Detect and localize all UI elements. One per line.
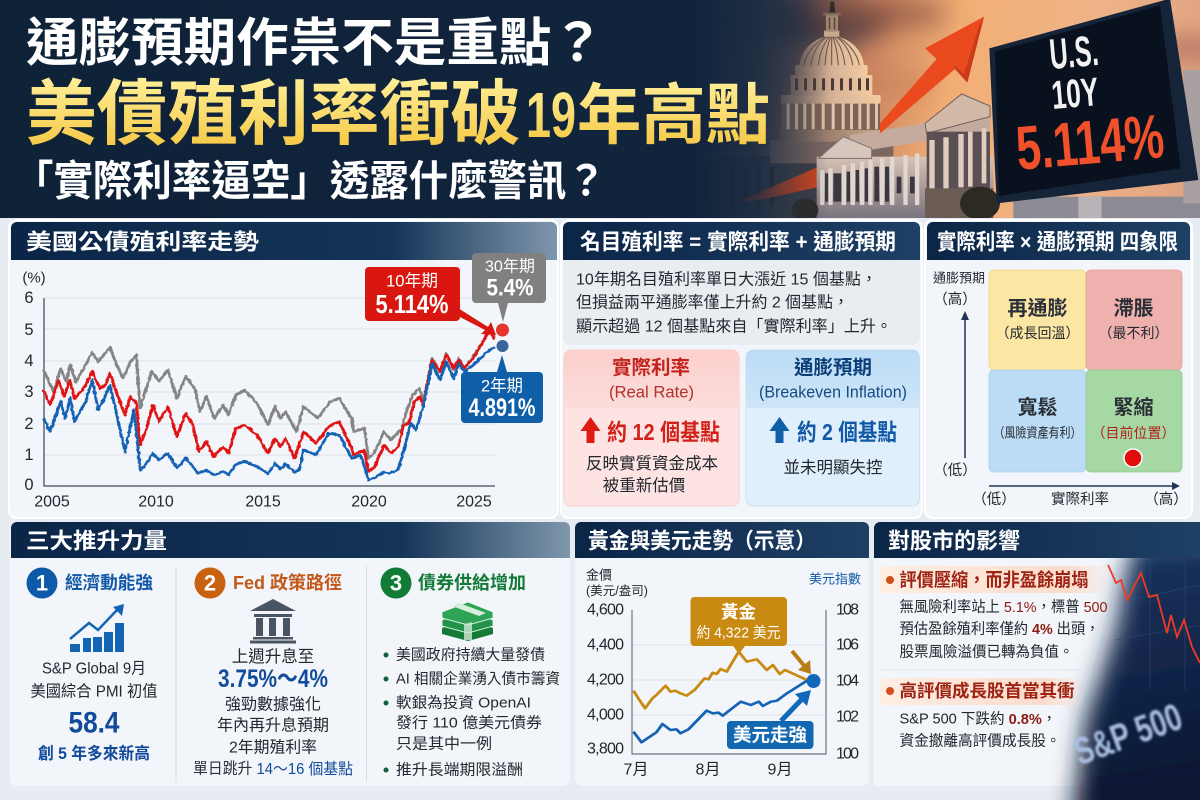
quadrant: tightening: 緊縮	[1114, 395, 1154, 419]
title: 美債殖利率衝破	[26, 76, 521, 154]
panel: quadrant	[925, 220, 1192, 518]
axes: 0	[24, 476, 34, 494]
column 3: bond supply: 發行 110 億美元債券	[396, 714, 542, 732]
chart axes: 106	[836, 636, 859, 654]
chart axes: 4,200	[587, 672, 624, 688]
column 2: Fed: 單日跳升 14～16 個基點	[193, 760, 353, 778]
card: real rate: 約 12 個基點	[607, 419, 720, 445]
column 2: Fed: 3.75%～4%	[218, 665, 328, 693]
chart axes: 108	[836, 602, 859, 618]
center wing	[817, 157, 993, 220]
block: growth stocks: S&P 500 下跌約 0.8%，	[900, 710, 1057, 728]
title: 年高點	[577, 78, 770, 152]
callout: dollar	[727, 721, 814, 749]
callout: 2-year: 4.891%	[468, 394, 536, 422]
explanation text: 顯示超過 12 個基點來自「實際利率」上升。	[576, 316, 892, 336]
quadrant: tightening	[1086, 370, 1182, 472]
axes: 3	[24, 383, 34, 401]
quadrant axes: （高）	[1144, 491, 1188, 508]
card: breakeven inflation: 並未明顯失控	[784, 458, 882, 477]
hero banner	[0, 0, 1200, 222]
callout: 10-year	[365, 267, 496, 335]
column 2: Fed	[193, 568, 353, 778]
callout: 2-year: 2年期	[481, 376, 523, 396]
card: breakeven inflation: (Breakeven Inflation)	[759, 382, 907, 402]
arrow: gold	[792, 651, 811, 674]
column 1: economy: 經濟動能強	[65, 572, 153, 593]
building: US Capitol	[740, 0, 1200, 218]
callout: 10-year: 10年期	[386, 272, 438, 290]
chart axes: 104	[836, 672, 859, 690]
column 2: Fed: 上週升息至	[232, 647, 314, 666]
quadrant axes: 實際利率	[1051, 490, 1109, 508]
quadrant: stagflation	[1086, 270, 1182, 370]
explanation text: 但損益兩平通膨率僅上升約 2 個基點，	[576, 294, 849, 312]
quadrant axes: （高）	[933, 291, 977, 308]
callout: 30-year	[472, 253, 546, 322]
chart axes: 9月	[768, 762, 792, 778]
title: 19	[526, 79, 576, 151]
column 3: bond supply: 推升長端期限溢酬	[396, 762, 523, 778]
axes: 1	[24, 446, 34, 464]
card: breakeven inflation: 通膨預期	[794, 357, 872, 379]
quadrant axes: （低）	[933, 462, 977, 479]
icon: bank	[250, 599, 296, 644]
title: 通膨預期作祟不是重點？	[26, 15, 604, 73]
chart axes: 4,600	[587, 602, 624, 618]
explanation text: 10年期名目殖利率單日大漲近 15 個基點，	[576, 270, 877, 288]
red arrow	[880, 17, 984, 133]
explanation text	[563, 260, 920, 345]
quadrant: easing	[989, 370, 1086, 472]
heading: 三大推升力量	[26, 528, 167, 554]
panel: three drivers	[10, 522, 570, 786]
chart axes: 4,400	[587, 636, 624, 654]
column 2: Fed: 強勁數據強化	[225, 696, 321, 714]
column 1: economy	[26, 568, 158, 763]
heading: 黃金與美元走勢（示意）	[588, 528, 816, 554]
chart axes: 4,000	[587, 706, 624, 724]
quadrant: easing: （風險資產有利）	[994, 424, 1082, 440]
block: valuation compression: 股票風險溢價已轉為負值。	[900, 644, 1074, 660]
board text: U.S. 10Y: U.S.	[1048, 27, 1100, 79]
callout: 30-year: 5.4%	[486, 274, 534, 302]
block: valuation compression: 預估盈餘殖利率僅約 4% 出頭，	[900, 620, 1100, 638]
column 3: bond supply: AI 相關企業湧入債市籌資	[396, 670, 560, 688]
callout: dollar: 美元走強	[733, 724, 807, 746]
icon: banknotes	[442, 602, 493, 641]
axes: 2010	[138, 494, 174, 510]
column 2: Fed: Fed 政策路徑	[233, 572, 342, 593]
axes: 6	[24, 289, 34, 307]
column 2: Fed: 2年期殖利率	[229, 738, 317, 756]
column 1: economy: S&P Global 9月	[42, 660, 146, 678]
quadrant: reflation	[989, 270, 1086, 370]
chart axes: 美元指數	[809, 572, 861, 586]
callout: gold: 約 4,322 美元	[696, 624, 780, 642]
quadrant axes: （低）	[972, 491, 1016, 508]
quadrant axes: 通膨預期	[933, 270, 985, 286]
block: valuation compression: 評價壓縮，而非盈餘崩塌	[900, 570, 1088, 590]
heading: 對股市的影響	[888, 528, 1020, 554]
column 2: Fed: 年內再升息預期	[217, 716, 329, 734]
icon: growth chart	[70, 604, 124, 652]
callout: 30-year: 30年期	[485, 258, 535, 276]
title	[14, 15, 770, 204]
chart axes: (美元/盎司)	[586, 584, 648, 598]
column 3: bond supply: 軟銀為投資 OpenAI	[396, 694, 531, 712]
quadrant: easing: 寬鬆	[1018, 396, 1058, 419]
marker dots	[496, 324, 509, 352]
card: real rate	[564, 350, 739, 506]
chart axes: 8月	[696, 762, 720, 778]
column 1: economy: 美國綜合 PMI 初值	[30, 682, 158, 700]
panel: stock impact	[874, 522, 1200, 800]
marker dot	[806, 674, 820, 688]
quadrant: tightening: （目前位置）	[1092, 425, 1176, 441]
block: growth stocks: 資金撤離高評價成長股。	[900, 732, 1060, 750]
image: S&P 500 board	[1068, 540, 1200, 800]
title: 「實際利率逼空」透露什麼警訊？	[14, 158, 606, 204]
column 2: Fed: 2	[204, 570, 216, 596]
quadrant axes	[933, 270, 1188, 508]
arrow: dollar	[781, 690, 811, 721]
axes: 2020	[351, 494, 387, 510]
lower arrow segment	[738, 166, 820, 202]
quadrant: stagflation: （最不利）	[1098, 325, 1168, 341]
column 1: economy: 創 5 年多來新高	[38, 743, 150, 763]
card: real rate: 反映實質資金成本	[586, 454, 718, 473]
card: real rate: (Real Rate)	[609, 382, 694, 402]
card: breakeven inflation	[746, 350, 920, 506]
callout: gold: 黃金	[721, 602, 756, 622]
axes: 5	[24, 321, 34, 339]
callout: 10-year: 5.114%	[376, 289, 448, 319]
column 1: economy: 1	[36, 570, 48, 596]
icon: blue up arrow	[770, 417, 790, 443]
card: real rate: 被重新估價	[603, 476, 685, 495]
chart axes: 3,800	[587, 740, 624, 758]
hero banner: 10Y	[1050, 70, 1101, 118]
panel: formula	[561, 220, 922, 518]
panel: yield chart	[9, 220, 558, 518]
card: breakeven inflation: 約 2 個基點	[797, 419, 897, 445]
column 1: economy: 58.4	[68, 706, 120, 740]
axes	[22, 270, 495, 510]
chart axes: 金價	[586, 568, 612, 582]
heading: 美國公債殖利率走勢	[26, 230, 259, 254]
column 3: bond supply: 只是其中一例	[396, 736, 492, 752]
axes: 2015	[245, 494, 281, 510]
quadrant: reflation: 再通膨	[1008, 297, 1068, 320]
card: real rate: 實際利率	[612, 357, 690, 379]
axes: 2	[24, 415, 34, 433]
axes: (%)	[22, 270, 46, 286]
heading: 名目殖利率 = 實際利率 + 通膨預期	[580, 230, 896, 254]
chart axes: 102	[836, 708, 859, 726]
block: growth stocks: 高評價成長股首當其衝	[900, 681, 1075, 701]
axes: 2005	[34, 494, 70, 510]
display board	[989, 0, 1198, 203]
axes: 2025	[456, 494, 492, 510]
column 3: bond supply	[380, 568, 560, 778]
chart axes	[586, 568, 861, 778]
icon: red up arrow	[580, 417, 600, 443]
block: valuation compression: 無風險利率站上 5.1%，標普 500	[900, 598, 1108, 616]
column 3: bond supply: 3	[390, 570, 402, 596]
left navy fade	[640, 0, 824, 218]
callout: 2-year	[461, 355, 543, 423]
block: growth stocks	[880, 678, 1085, 750]
quadrant: reflation: （成長回溫）	[996, 325, 1080, 341]
line chart: yields	[44, 330, 495, 480]
quadrant: stagflation: 滯脹	[1114, 297, 1154, 320]
column 3: bond supply: 債券供給增加	[418, 572, 526, 593]
block: valuation compression	[880, 566, 1112, 660]
line chart: gold and dollar	[633, 652, 807, 742]
chart axes: 100	[836, 746, 859, 762]
column 3: bond supply: 美國政府持續大量發債	[396, 646, 545, 664]
axes: 4	[24, 352, 34, 370]
panel: gold and dollar	[575, 522, 869, 786]
callout: gold	[690, 597, 787, 654]
chart axes: 7月	[624, 762, 648, 778]
